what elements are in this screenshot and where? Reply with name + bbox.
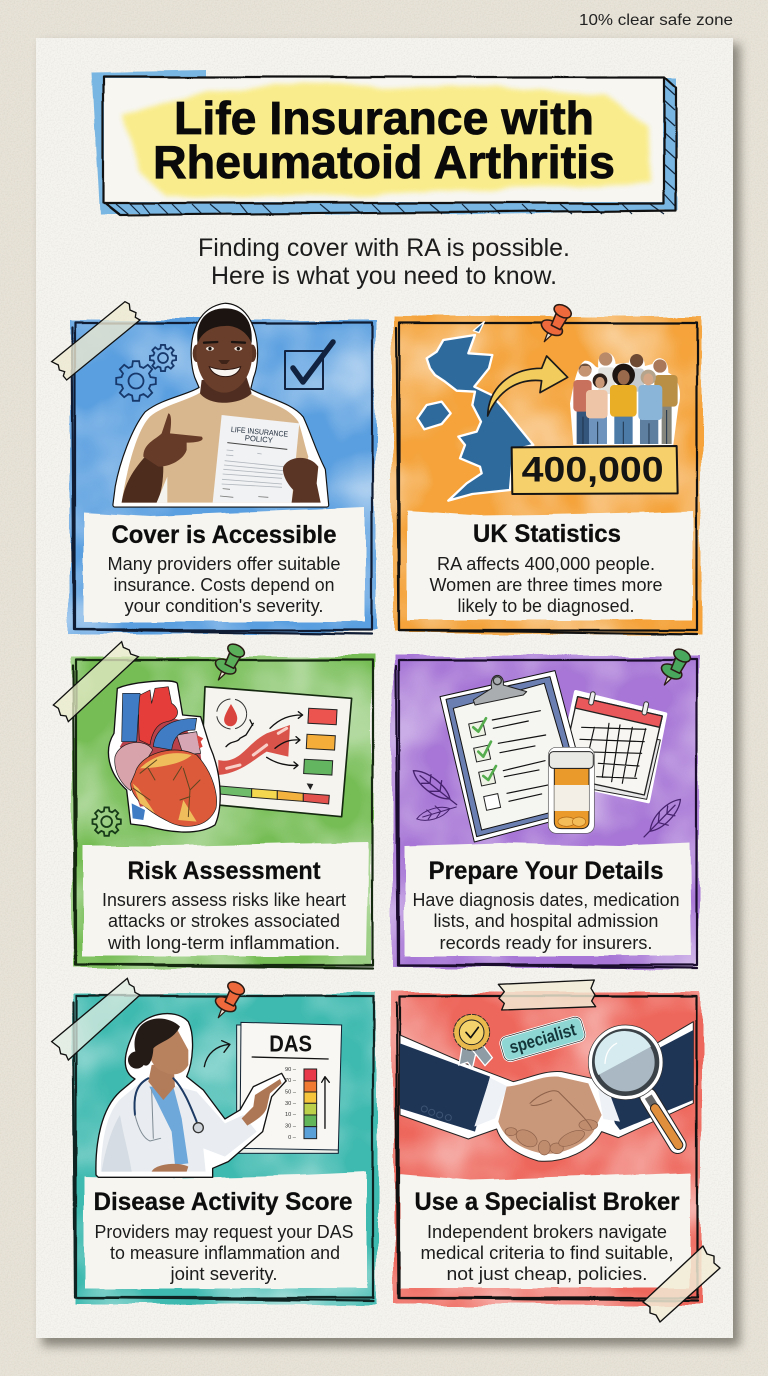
frame xyxy=(72,323,372,634)
DAS chart sheet: DAS xyxy=(269,1031,312,1057)
body text: medical criteria to find suitable, xyxy=(420,1243,674,1263)
heading: UK Statistics xyxy=(473,520,621,548)
body text: Have diagnosis dates, medication xyxy=(412,890,680,910)
body text: to measure inflammation and xyxy=(110,1243,340,1263)
body text xyxy=(94,1222,354,1284)
arrow xyxy=(488,356,568,416)
body text: Women are three times more xyxy=(430,575,662,595)
magnifying glass xyxy=(588,1025,678,1145)
body text: joint severity. xyxy=(169,1264,278,1284)
blue wash xyxy=(70,320,376,632)
badge: 400,000: 400,000 xyxy=(522,451,664,490)
leaves xyxy=(413,771,680,840)
panel: Cover is Accessible xyxy=(52,302,376,634)
text panel xyxy=(400,1172,690,1288)
DAS chart sheet: 50 – xyxy=(285,1089,297,1095)
DAS chart sheet: 90 – xyxy=(285,1067,297,1073)
pin xyxy=(213,642,247,680)
frame xyxy=(396,660,697,968)
heart xyxy=(108,681,220,832)
clipboard xyxy=(440,671,592,842)
curved arrow xyxy=(204,1041,230,1067)
tape xyxy=(498,980,596,1010)
teal wash xyxy=(74,994,376,1304)
award ribbon xyxy=(454,1014,492,1068)
frame xyxy=(73,660,373,968)
DAS chart sheet: 30 – xyxy=(285,1124,297,1130)
illustration: man holding policy: LIFE INSURANCE xyxy=(231,425,288,439)
frame xyxy=(73,996,373,1301)
title: Life Insurance with xyxy=(174,92,594,144)
title: Rheumatoid Arthritis xyxy=(153,136,615,188)
body text: your condition's severity. xyxy=(124,596,324,616)
green wash xyxy=(73,656,373,968)
frame xyxy=(396,996,697,1301)
red wash xyxy=(393,992,701,1304)
body text: Independent brokers navigate xyxy=(427,1222,667,1242)
banner white interior xyxy=(104,78,663,202)
body text xyxy=(430,554,662,616)
text panel xyxy=(407,511,692,620)
text panel xyxy=(83,842,368,956)
body text: RA affects 400,000 people. xyxy=(437,554,655,574)
pill bottle xyxy=(548,747,594,833)
banner sketch frame xyxy=(103,77,676,215)
tape xyxy=(52,978,140,1060)
body text: insurance. Costs depend on xyxy=(114,575,334,595)
heading: Prepare Your Details xyxy=(428,857,664,885)
body text: Many providers offer suitable xyxy=(108,554,340,574)
panel: Use a Specialist Broker xyxy=(393,980,720,1322)
icon: checkbox xyxy=(285,342,333,389)
tape xyxy=(52,302,140,380)
body text xyxy=(102,890,346,953)
subtitle xyxy=(198,234,570,290)
calendar xyxy=(557,691,666,802)
pin xyxy=(213,979,247,1018)
icon: gears xyxy=(116,345,176,401)
icon: gear xyxy=(92,807,121,836)
panel: UK Statistics xyxy=(393,302,701,634)
DAS chart sheet: 70 – xyxy=(285,1078,297,1084)
text panel xyxy=(84,1172,366,1288)
DAS chart sheet: 10 – xyxy=(285,1112,297,1118)
safe zone note: 10% clear safe zone xyxy=(579,12,733,29)
DAS chart sheet: 0 – xyxy=(288,1135,297,1141)
panel: Risk Assessment xyxy=(53,642,373,968)
tape xyxy=(53,642,138,722)
orange wash xyxy=(393,316,701,634)
heading: Cover is Accessible xyxy=(112,521,337,549)
body text xyxy=(420,1222,674,1284)
badge: 400,000 xyxy=(512,446,678,494)
body text: with long-term inflammation. xyxy=(107,933,340,953)
map of UK xyxy=(417,322,533,501)
doctor xyxy=(96,1014,286,1177)
illustration: man holding policy: POLICY xyxy=(244,433,273,445)
body text xyxy=(412,890,680,953)
title xyxy=(153,92,615,188)
body text: Providers may request your DAS xyxy=(94,1222,354,1242)
heading: Use a Specialist Broker xyxy=(414,1188,680,1216)
text panel xyxy=(405,843,692,956)
pin xyxy=(539,302,573,342)
frame xyxy=(396,323,697,634)
purple wash xyxy=(393,656,699,968)
handshake xyxy=(400,1022,693,1161)
DAS chart sheet xyxy=(237,1022,342,1153)
body text: records ready for insurers. xyxy=(440,933,652,953)
tape: bottom right xyxy=(643,1246,720,1322)
DAS chart sheet: 30 – xyxy=(285,1101,297,1107)
heading: Risk Assessment xyxy=(128,857,321,885)
body text: likely to be diagnosed. xyxy=(458,596,634,616)
banner hatched edge xyxy=(106,85,675,214)
body text: attacks or strokes associated xyxy=(108,911,340,931)
people group xyxy=(570,352,680,445)
banner blue watercolor xyxy=(92,70,677,214)
banner yellow highlight xyxy=(122,84,652,198)
specialist tag: specialist xyxy=(507,1019,578,1057)
pin xyxy=(659,647,693,685)
panel: Disease Activity Score xyxy=(52,978,376,1304)
subtitle: Here is what you need to know. xyxy=(211,262,557,290)
illustration: man holding policy xyxy=(115,305,327,505)
chart sheet xyxy=(200,687,352,817)
body text: lists, and hospital admission xyxy=(434,911,658,931)
body text xyxy=(108,554,340,616)
body text: Insurers assess risks like heart xyxy=(102,890,346,910)
text panel xyxy=(83,507,365,622)
heading: Disease Activity Score xyxy=(94,1188,353,1216)
subtitle: Finding cover with RA is possible. xyxy=(198,234,570,262)
panel: title banner xyxy=(92,70,677,215)
panel: Prepare Your Details xyxy=(393,647,699,968)
body text: not just cheap, policies. xyxy=(446,1264,648,1284)
